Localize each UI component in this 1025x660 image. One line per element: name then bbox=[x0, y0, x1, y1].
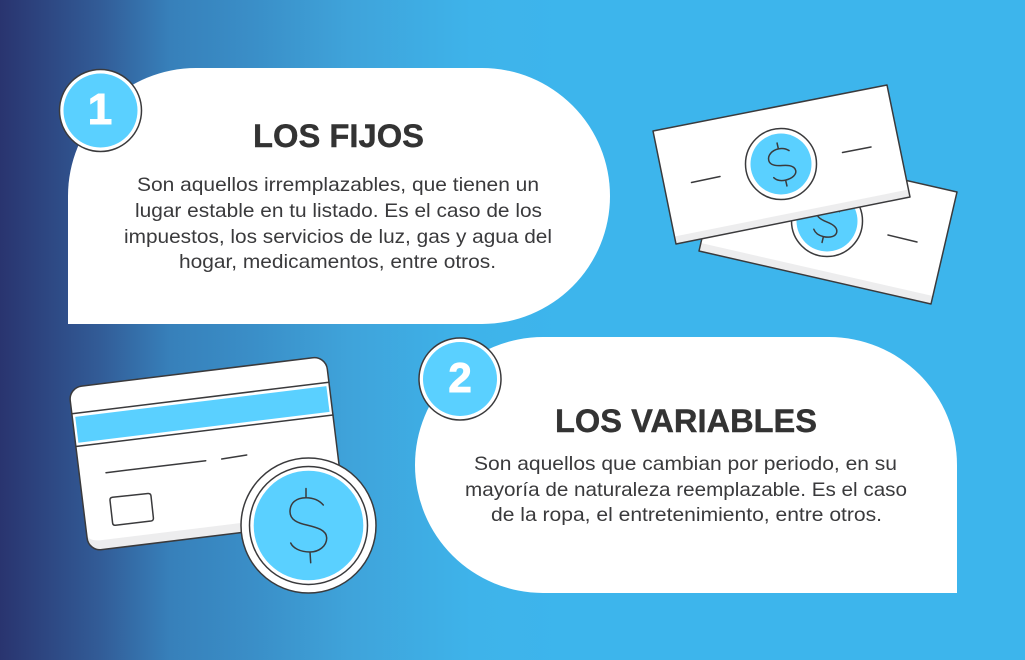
card number lines bbox=[106, 455, 247, 473]
coin bbox=[241, 458, 376, 593]
panel: los fijos bbox=[60, 68, 610, 324]
badge: number 2: 2 bbox=[448, 354, 472, 401]
panel 1 shape bbox=[68, 68, 610, 324]
text block: fijos description: hogar, medicamentos, entre otros. bbox=[179, 251, 496, 273]
text block: fijos description: impuestos, los servicios de luz, gas y agua del bbox=[124, 226, 552, 248]
icon: credit card with coin bbox=[69, 356, 376, 593]
badge: number 1: 1 bbox=[88, 85, 112, 134]
text block: variables description: mayoría de naturaleza reemplazable. Es el caso bbox=[465, 479, 907, 501]
panel 2 shape bbox=[415, 337, 957, 593]
icon: money bills bbox=[653, 85, 957, 304]
heading: los variables: LOS VARIABLES bbox=[555, 403, 817, 439]
badge: number 1 bbox=[60, 70, 142, 152]
text block: fijos description bbox=[124, 174, 552, 273]
text block: variables description: de la ropa, el entretenimiento, entre otros. bbox=[491, 504, 882, 526]
heading: los fijos: LOS FIJOS bbox=[253, 118, 424, 154]
text block: fijos description: lugar estable en tu listado. Es el caso de los bbox=[135, 200, 542, 222]
back bill bbox=[699, 139, 957, 304]
card chip bbox=[110, 493, 153, 525]
text block: variables description bbox=[465, 453, 907, 526]
panel: los variables bbox=[415, 337, 957, 593]
text block: fijos description: Son aquellos irremplazables, que tienen un bbox=[137, 174, 539, 196]
front bill bbox=[653, 85, 910, 244]
text block: variables description: Son aquellos que cambian por periodo, en su bbox=[474, 453, 897, 475]
badge: number 2 bbox=[419, 338, 501, 420]
credit card bbox=[69, 356, 346, 551]
